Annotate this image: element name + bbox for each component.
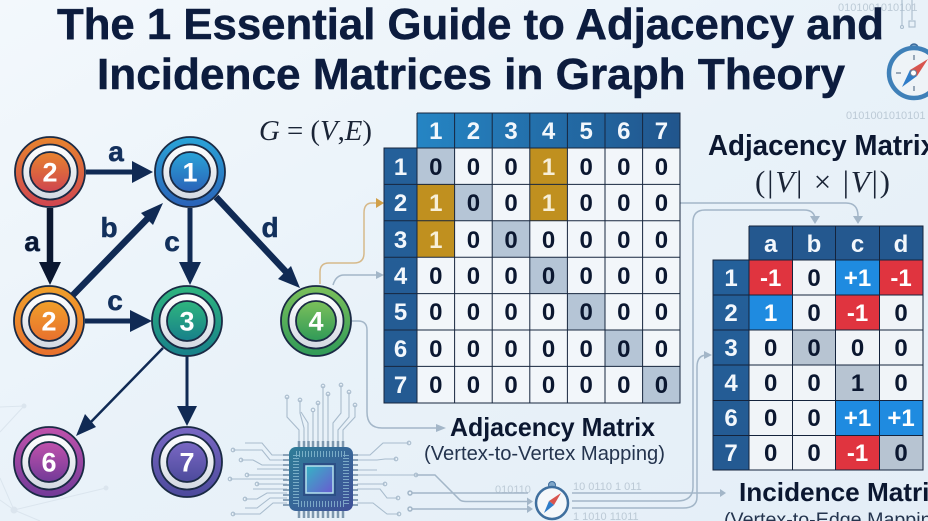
incidence cells: +1 — [844, 405, 871, 432]
adjacency cells: 0 — [429, 154, 442, 181]
node 3: 3 — [179, 306, 195, 336]
edge labels — [24, 136, 279, 316]
node 6: 6 — [41, 448, 57, 478]
incidence row headers: 7 — [724, 440, 738, 467]
adjacency cells: 0 — [617, 227, 630, 254]
adjacency cells: 0 — [580, 190, 593, 217]
incidence cells: 0 — [894, 335, 908, 362]
adjacency cells: 0 — [504, 372, 518, 399]
node 1: 1 — [182, 158, 198, 188]
incidence cells: 1 — [764, 300, 777, 327]
adjacency cells: 0 — [617, 336, 630, 363]
binary background text: 10 0110 1 011 — [573, 481, 642, 493]
edge labels: a — [24, 226, 40, 257]
adjacency cells: 0 — [429, 299, 442, 326]
incidence cells: 0 — [851, 335, 864, 362]
edge d: 1 to 4 — [216, 197, 300, 288]
adjacency cells: 0 — [617, 190, 630, 217]
incidence matrix caption — [724, 477, 928, 521]
node 4: 4 — [308, 306, 324, 336]
adjacency cells: 0 — [580, 227, 593, 254]
incidence matrix — [713, 226, 923, 470]
incidence header row: b — [807, 231, 821, 258]
adjacency cells: 0 — [655, 372, 668, 399]
incidence cells: 0 — [807, 440, 821, 467]
adjacency cells: 0 — [429, 372, 442, 399]
incidence cells: 0 — [894, 370, 908, 397]
edge labels: b — [100, 212, 118, 243]
incidence row headers: 1 — [724, 265, 738, 292]
adjacency cells: 0 — [504, 263, 518, 290]
decorative network bottom left — [0, 404, 108, 521]
adjacency matrix caption — [424, 412, 665, 465]
incidence row headers: 3 — [724, 335, 738, 362]
adjacency cells: 1 — [429, 190, 442, 217]
adjacency cells: 0 — [504, 154, 518, 181]
adjacency cells: 0 — [504, 299, 518, 326]
adjacency cells: 0 — [467, 336, 480, 363]
node 2 top — [15, 137, 85, 207]
adjacency cells: 0 — [504, 227, 518, 254]
adjacency cells: 0 — [580, 299, 593, 326]
adjacency cells: 0 — [542, 227, 555, 254]
incidence row headers: 2 — [724, 300, 738, 327]
adjacency cells: 0 — [542, 263, 555, 290]
incidence cells: 0 — [764, 335, 777, 362]
formula G=(V,E): G = (V,E) — [259, 116, 372, 147]
binary background text: 0101001010101 — [846, 110, 926, 122]
node 7: 7 — [179, 448, 195, 478]
incidence cells: 0 — [764, 440, 777, 467]
adjacency cells: 0 — [542, 299, 555, 326]
node 7 — [152, 427, 222, 497]
connector wires — [320, 203, 858, 511]
adjacency cells: 0 — [655, 227, 668, 254]
adjacency cells: 0 — [467, 263, 480, 290]
binary background text: 0101001010101 — [838, 2, 918, 14]
binary background text: 010110 — [495, 484, 531, 496]
adjacency row headers: 2 — [394, 190, 407, 217]
adjacency matrix caption: (Vertex-to-Vertex Mapping) — [424, 443, 665, 465]
icon: compass bottom — [536, 482, 568, 519]
edge labels: a — [108, 136, 124, 167]
incidence cells: 0 — [807, 335, 821, 362]
adjacency cells: 0 — [580, 263, 593, 290]
adjacency cells: 0 — [467, 299, 480, 326]
edge a: 2 to 2 — [39, 208, 61, 285]
edge a: 2 to 1 — [86, 161, 153, 183]
adjacency cells: 0 — [655, 190, 668, 217]
incidence cells: 0 — [807, 300, 821, 327]
adjacency cells: 0 — [467, 190, 480, 217]
adjacency cells: 1 — [542, 190, 555, 217]
incidence row headers — [713, 260, 749, 470]
adjacency cells: 0 — [655, 336, 668, 363]
adjacency row headers — [384, 148, 417, 403]
incidence cells: -1 — [847, 300, 868, 327]
adjacency row headers: 1 — [394, 154, 407, 181]
incidence header row — [749, 226, 923, 260]
adjacency cells: 0 — [542, 372, 555, 399]
incidence cells: 0 — [807, 405, 821, 432]
icon: circuit chip — [228, 383, 418, 521]
binary background text — [495, 2, 926, 521]
adjacency header row: 1234567 — [429, 118, 668, 145]
incidence cells: +1 — [887, 405, 915, 432]
incidence cells: 0 — [764, 370, 777, 397]
adjacency row headers: 5 — [394, 299, 407, 326]
incidence cells: 0 — [894, 440, 908, 467]
adjacency row headers: 6 — [394, 336, 407, 363]
adjacency cells: 1 — [542, 154, 555, 181]
incidence cells: 0 — [764, 405, 777, 432]
title: Incidence Matrices in Graph Theory — [97, 50, 846, 99]
graph edges — [39, 161, 300, 436]
arrowheads on wires — [376, 198, 863, 513]
heading: adjacency matrix size — [708, 130, 928, 199]
edge: 3 to 6 — [76, 348, 163, 436]
node 3 — [152, 286, 222, 356]
incidence cells: 0 — [807, 265, 821, 292]
incidence row headers: 6 — [724, 405, 738, 432]
adjacency cells: 0 — [617, 372, 630, 399]
adjacency matrix — [384, 113, 680, 403]
icon: compass top right — [889, 44, 928, 98]
adjacency row headers: 4 — [394, 263, 408, 290]
adjacency cells: 0 — [467, 154, 480, 181]
adjacency cells: 0 — [504, 336, 518, 363]
edge labels: c — [107, 285, 123, 316]
adjacency matrix caption: Adjacency Matrix — [450, 412, 656, 442]
edge c: 2 to 3 — [85, 310, 152, 332]
adjacency cells: 0 — [467, 372, 480, 399]
circuit decoration top right — [900, 0, 915, 28]
adjacency cells: 0 — [617, 299, 630, 326]
incidence header row: d — [894, 231, 908, 258]
adjacency row headers: 7 — [394, 372, 407, 399]
incidence row headers: 4 — [724, 370, 738, 397]
edge b: 2 to 1 — [73, 203, 163, 295]
adjacency cells: 1 — [429, 227, 442, 254]
node 6 — [14, 427, 84, 497]
edge c: 1 to 3 — [179, 208, 201, 285]
incidence header row: c — [851, 231, 864, 258]
adjacency cells: 0 — [655, 299, 668, 326]
incidence cells: 1 — [851, 370, 864, 397]
adjacency cells: 0 — [504, 190, 518, 217]
node 2 top: 2 — [42, 158, 58, 188]
adjacency cells: 0 — [429, 336, 442, 363]
node 4 — [281, 286, 351, 356]
incidence cells: -1 — [847, 440, 868, 467]
adjacency cells: 0 — [542, 336, 555, 363]
adjacency cells: 0 — [580, 336, 593, 363]
incidence cells: -1 — [760, 265, 781, 292]
adjacency cells: 0 — [655, 154, 668, 181]
heading: adjacency matrix size: (|V| × |V|) — [755, 164, 890, 199]
edge labels: d — [261, 212, 279, 243]
incidence cells: -1 — [890, 265, 912, 292]
incidence cells — [713, 226, 923, 470]
adjacency cells: 0 — [580, 372, 593, 399]
adjacency cells: 0 — [580, 154, 593, 181]
adjacency cells — [384, 113, 680, 403]
title — [57, 0, 884, 99]
adjacency row headers: 3 — [394, 227, 407, 254]
adjacency cells: 0 — [617, 154, 630, 181]
edge labels: c — [164, 226, 180, 257]
title: The 1 Essential Guide to Adjacency and — [57, 0, 884, 49]
adjacency cells: 0 — [617, 263, 630, 290]
edge: 3 to 7 — [177, 356, 197, 426]
adjacency cells: 0 — [655, 263, 668, 290]
adjacency cells: 0 — [467, 227, 480, 254]
node 2 middle — [14, 286, 84, 356]
incidence cells: 0 — [894, 300, 908, 327]
incidence cells: 0 — [807, 370, 821, 397]
incidence header row: a — [764, 231, 778, 258]
node 2 middle: 2 — [41, 306, 57, 336]
incidence cells: +1 — [844, 265, 871, 292]
node 1 — [155, 137, 225, 207]
adjacency cells: 0 — [429, 263, 442, 290]
